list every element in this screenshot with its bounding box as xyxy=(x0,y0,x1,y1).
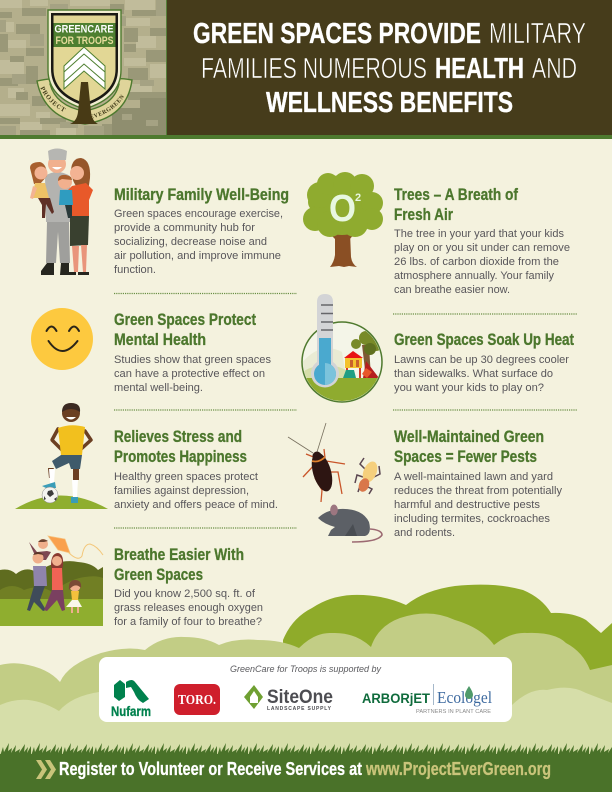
body text xyxy=(394,228,570,296)
illustration: military family xyxy=(30,148,93,275)
section: Relieves Stress xyxy=(15,403,278,511)
body text: including termites, cockroaches xyxy=(394,513,550,525)
title: GREEN SPACES PROVIDE xyxy=(193,18,481,50)
light green hills xyxy=(0,688,612,760)
illustration: thermometer and playground xyxy=(300,294,384,404)
heading: Green Spaces Soak Up Heat xyxy=(394,331,574,349)
illustration: oxygen tree xyxy=(303,172,383,267)
body text: you want your kids to play on? xyxy=(394,382,544,394)
illustration: cockroach, termite, mouse xyxy=(288,423,382,542)
logo: Toro xyxy=(174,684,220,715)
body text: reduces the threat from potentially xyxy=(394,485,563,497)
body text: and rodents. xyxy=(394,527,455,539)
logo tree trunk xyxy=(70,82,98,124)
footer text: www.ProjectEverGreen.org xyxy=(365,759,551,779)
shield xyxy=(48,10,121,109)
logo text xyxy=(54,24,114,47)
icon: double chevron xyxy=(36,760,56,779)
title: HEALTH xyxy=(435,53,524,85)
logo text: FOR TROOPS xyxy=(56,35,114,47)
logo: Nufarm xyxy=(111,680,151,719)
mother xyxy=(51,553,63,570)
logo: Nufarm: Nufarm xyxy=(111,703,151,719)
sponsors caption: GreenCare for Troops is supported by xyxy=(230,664,381,674)
illustration: boy with soccer ball xyxy=(15,403,108,509)
body text: mental well-being. xyxy=(114,382,203,394)
body text: grass releases enough oxygen xyxy=(114,602,263,614)
body text: air pollution, and improve immune xyxy=(114,250,281,262)
logo: Arborjet and Ecologel: ARBORjET xyxy=(362,691,431,706)
logo: SiteOne xyxy=(244,685,333,712)
O2 label: O xyxy=(329,188,356,230)
section: Soak Up Heat xyxy=(300,294,574,404)
kite xyxy=(48,536,70,553)
body text xyxy=(394,354,569,394)
body text: Healthy green spaces protect xyxy=(114,471,258,483)
heading xyxy=(114,428,247,466)
section: Military Family Well-Being xyxy=(30,148,289,276)
logo: Arborjet and Ecologel xyxy=(362,684,492,715)
section: Fewer Pests xyxy=(288,423,563,542)
cockroach xyxy=(288,423,345,502)
ribbon xyxy=(36,78,133,125)
heading: Military Family Well-Being xyxy=(114,186,289,204)
father xyxy=(32,552,44,564)
body text: function. xyxy=(114,264,156,276)
thermometer xyxy=(311,294,339,387)
body text: socializing, decrease noise and xyxy=(114,236,267,248)
section: Mental Health xyxy=(31,308,271,394)
mid green hills xyxy=(0,613,612,750)
girl xyxy=(30,162,54,218)
body text xyxy=(114,588,263,628)
body text: can have a protective effect on xyxy=(114,368,265,380)
body text: can breathe easier now. xyxy=(394,284,510,296)
logo: SiteOne: LANDSCAPE SUPPLY xyxy=(267,706,332,712)
title: FAMILIES NUMEROUS xyxy=(201,53,427,85)
icon: smiley face xyxy=(31,308,93,370)
body text: A well-maintained lawn and yard xyxy=(394,471,553,483)
logo: Toro: TORO. xyxy=(178,693,216,708)
body text: Studies show that green spaces xyxy=(114,354,271,366)
mouse xyxy=(318,504,382,542)
body text: for a family of four to breathe? xyxy=(114,616,262,628)
crown xyxy=(303,172,383,237)
logo: GreenCare for Troops shield xyxy=(36,9,133,125)
body text: atmosphere annually. Your family xyxy=(394,270,554,282)
section: Breathe Easier xyxy=(0,536,263,628)
chevrons xyxy=(64,47,105,89)
heading: Trees – A Breath of xyxy=(394,186,518,204)
body text: Did you know 2,500 sq. ft. of xyxy=(114,588,256,600)
body text: than sidewalks. What surface do xyxy=(394,368,553,380)
heading: Mental Health xyxy=(114,331,206,349)
toddler xyxy=(58,175,73,218)
body text xyxy=(394,471,563,539)
sponsors panel xyxy=(99,657,512,722)
mother xyxy=(64,158,93,275)
body text: anxiety and offers peace of mind. xyxy=(114,499,278,511)
body text: 26 lbs. of carbon dioxide from the xyxy=(394,256,559,268)
ribbon: PROJECT xyxy=(40,86,66,112)
title: WELLNESS BENEFITS xyxy=(266,87,513,119)
heading xyxy=(394,186,518,224)
heading: Breathe Easier With xyxy=(114,546,244,564)
logo: Arborjet and Ecologel: PARTNERS IN PLANT CARE xyxy=(416,709,491,715)
title: AND xyxy=(532,53,577,85)
green stripe under header xyxy=(0,135,612,139)
trunk xyxy=(330,232,357,267)
camouflage panel xyxy=(0,0,168,135)
body text: Green spaces encourage exercise, xyxy=(114,208,283,220)
header band xyxy=(0,0,612,139)
ribbon: EVERGREEN xyxy=(92,94,124,118)
body text: The tree in your yard that your kids xyxy=(394,228,564,240)
heading: Fresh Air xyxy=(394,206,453,224)
title background xyxy=(167,0,612,135)
body text: families against depression, xyxy=(114,485,249,497)
body text: Lawns can be up 30 degrees cooler xyxy=(394,354,569,366)
O2 label: 2 xyxy=(355,192,361,204)
heading xyxy=(114,546,244,584)
body text xyxy=(114,208,283,276)
heading: Relieves Stress and xyxy=(114,428,242,446)
logo text: GREENCARE xyxy=(54,24,114,36)
section: Trees xyxy=(303,172,570,296)
logo: SiteOne: SiteOne xyxy=(267,687,333,708)
body text: provide a community hub for xyxy=(114,222,255,234)
body text: harmful and destructive pests xyxy=(394,499,541,511)
park circle xyxy=(300,322,384,404)
heading: Well-Maintained Green xyxy=(394,428,544,446)
footer call to action xyxy=(36,759,551,779)
title xyxy=(193,18,586,119)
grass xyxy=(0,742,612,756)
footer text: Register to Volunteer or Receive Services at xyxy=(59,759,362,779)
girl xyxy=(70,580,80,592)
heading: Green Spaces Protect xyxy=(114,311,256,329)
heading xyxy=(114,311,256,349)
soldier xyxy=(41,148,71,275)
footer band xyxy=(0,754,612,792)
heading xyxy=(394,428,544,466)
body text: play on or you sit under can remove xyxy=(394,242,570,254)
termite xyxy=(355,458,380,494)
illustration: family in park with kite xyxy=(0,536,103,626)
heading: Spaces = Fewer Pests xyxy=(394,448,537,466)
heading: Green Spaces xyxy=(114,566,203,584)
body text xyxy=(114,471,278,511)
logo: Arborjet and Ecologel: Ecologel xyxy=(437,688,492,707)
dark green hill xyxy=(283,585,612,720)
heading: Promotes Happiness xyxy=(114,448,247,466)
bottom landscape hills xyxy=(0,585,612,792)
body text xyxy=(114,354,271,394)
child on shoulders xyxy=(29,542,51,560)
